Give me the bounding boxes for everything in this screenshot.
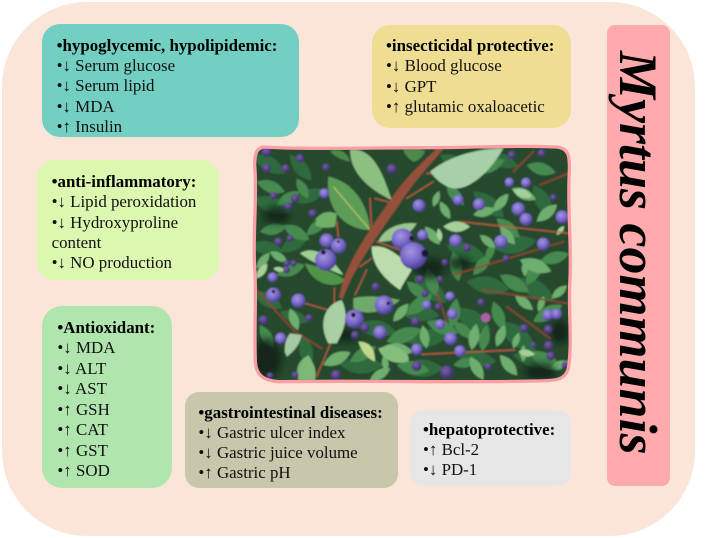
panel: hypoglycemic, hypolipidemic: •↑ Insulin	[57, 117, 122, 136]
panel: anti-inflammatory: •anti-inflammatory:	[52, 172, 196, 191]
panel: hepatoprotective: •↓ PD-1	[423, 460, 477, 479]
panel: gastrointestinal diseases	[185, 392, 398, 488]
panel: hepatoprotective: •↑ Bcl-2	[423, 440, 479, 459]
panel: anti-inflammatory: content	[52, 233, 101, 252]
panel: anti-inflammatory: •↓ NO production	[52, 253, 172, 272]
panel: hypoglycemic, hypolipidemic: •↓ MDA	[57, 97, 115, 116]
panel: insecticidal protective: •insecticidal protective:	[386, 36, 554, 55]
photo: myrtle branch with purple berries	[252, 144, 572, 384]
panel: insecticidal protective	[372, 25, 571, 128]
berries	[259, 147, 568, 380]
branches	[255, 152, 568, 377]
panel: insecticidal protective: •↓ Blood glucose	[386, 56, 502, 75]
panel: antioxidant: •↑ GSH	[57, 400, 110, 419]
foliage background	[250, 142, 577, 385]
wavy pink border	[254, 146, 570, 382]
panel: antioxidant: •↑ GST	[57, 441, 108, 460]
panel: antioxidant	[42, 306, 172, 488]
panel: insecticidal protective: •↓ GPT	[386, 77, 436, 96]
panel: gastrointestinal diseases: •↓ Gastric ulcer index	[198, 423, 345, 442]
panel: antioxidant: •↓ ALT	[57, 359, 106, 378]
large leaves	[350, 150, 392, 200]
panel: hypoglycemic, hypolipidemic: •hypoglycemic, hypolipidemic:	[57, 36, 277, 55]
panel: hypoglycemic, hypolipidemic: •↓ Serum glucose	[57, 56, 175, 75]
panel: hypoglycemic, hypolipidemic: •↓ Serum lipid	[57, 76, 154, 95]
title panel: Myrtus communis: Myrtus communis	[608, 51, 668, 455]
panel: hypoglycemic, hypolipidemic	[42, 24, 299, 137]
panel: hepatoprotective	[410, 410, 571, 486]
panel: anti-inflammatory: •↓ Hydroxyproline	[52, 213, 178, 232]
panel: antioxidant: •↑ SOD	[57, 461, 110, 480]
panel: antioxidant: •↓ AST	[57, 379, 107, 398]
panel: gastrointestinal diseases: •↓ Gastric juice volume	[198, 443, 358, 462]
panel: antioxidant: •↑ CAT	[57, 420, 108, 439]
panel: antioxidant: •↓ MDA	[57, 338, 115, 357]
main stem	[339, 148, 443, 299]
panel: insecticidal protective: •↑ glutamic oxaloacetic	[386, 97, 545, 116]
panel: anti-inflammatory	[37, 160, 219, 280]
panel: anti-inflammatory: •↓ Lipid peroxidation	[52, 192, 196, 211]
panel: antioxidant: •Antioxidant:	[57, 318, 155, 337]
dark shadow patches in the foliage	[252, 207, 570, 380]
panel: gastrointestinal diseases: •↑ Gastric pH	[198, 463, 291, 482]
panel: gastrointestinal diseases: •gastrointestinal diseases:	[198, 403, 383, 422]
panel: hepatoprotective: •hepatoprotective:	[423, 420, 555, 439]
